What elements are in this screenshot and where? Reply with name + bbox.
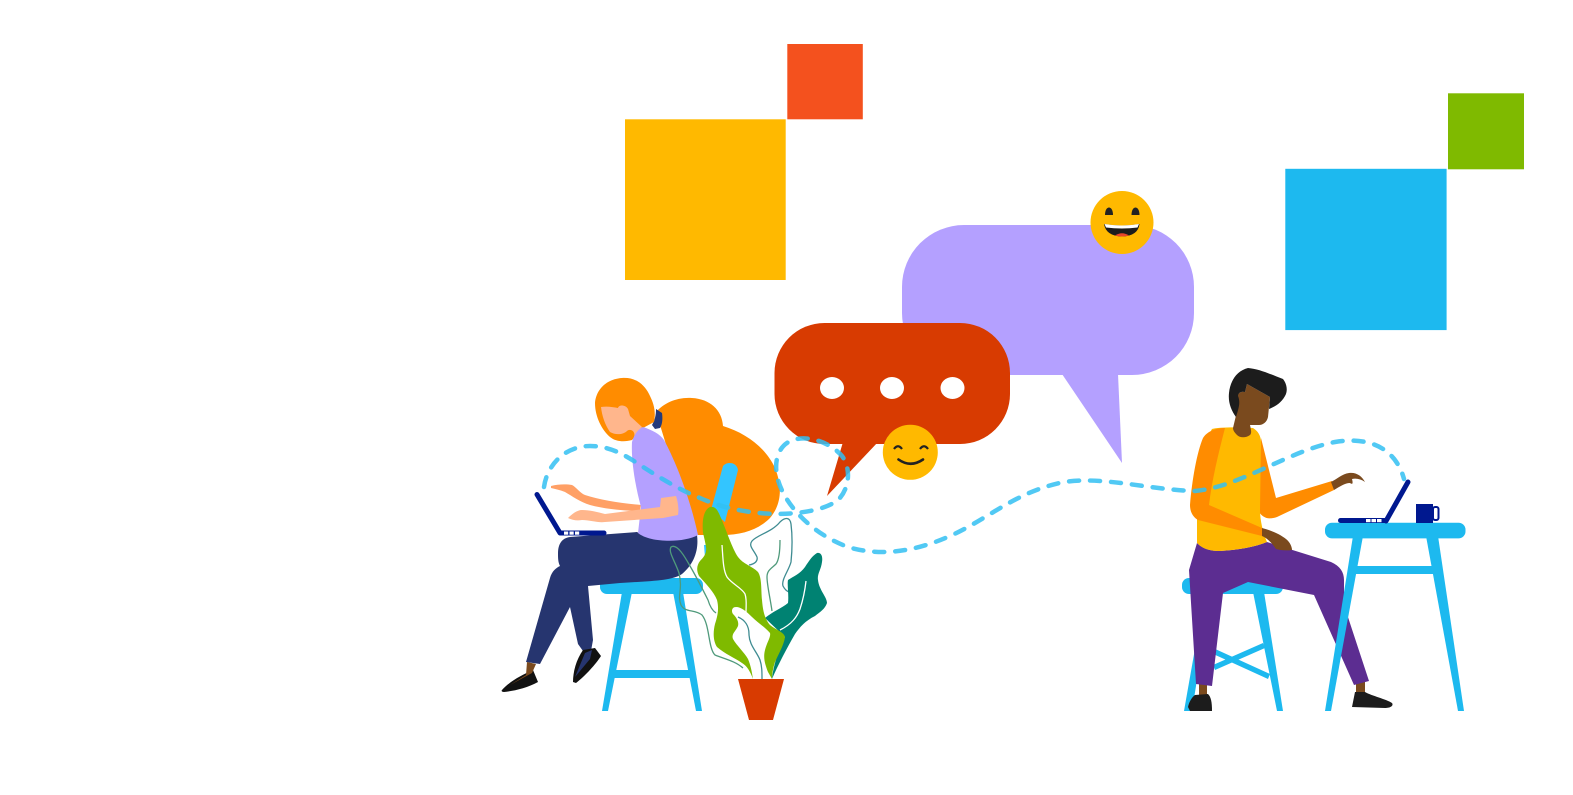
purple speech bubble <box>902 225 1194 463</box>
man pants <box>1189 542 1369 686</box>
man left shoe <box>1188 694 1212 711</box>
cyan tablet strip <box>704 463 738 558</box>
man head <box>1233 384 1270 437</box>
green leaf vein <box>722 545 746 612</box>
woman seated at laptop <box>502 378 780 692</box>
collar <box>652 409 662 429</box>
hair bun <box>656 398 780 535</box>
man seated at table <box>1188 368 1393 711</box>
man hair <box>1229 368 1287 417</box>
red speech bubble <box>774 323 1010 496</box>
man shirt <box>1197 427 1267 551</box>
woman shirt <box>632 427 698 541</box>
vine centre <box>767 540 780 611</box>
woman left shoe <box>502 670 538 692</box>
icon: laughing emoji <box>1090 191 1154 254</box>
green leaf <box>697 507 785 679</box>
plant pot <box>738 679 784 720</box>
woman laptop <box>537 494 606 536</box>
man back hand <box>1331 473 1365 490</box>
vine left <box>670 546 743 668</box>
woman right shoe inner <box>575 650 592 677</box>
man right shoe <box>1352 692 1393 708</box>
woman back arm <box>551 484 641 511</box>
woman stool <box>600 578 703 711</box>
yellow square <box>625 119 786 280</box>
blue square <box>1285 169 1447 330</box>
plant <box>670 507 827 720</box>
woman front arm <box>568 496 678 522</box>
icon: smiling emoji <box>883 425 938 480</box>
vine back <box>749 518 792 592</box>
dashed connection line <box>544 438 1404 552</box>
man ankles <box>1199 683 1207 695</box>
woman pants <box>526 532 697 664</box>
man laptop <box>1338 482 1408 523</box>
man back arm <box>1258 438 1334 518</box>
vine front <box>738 617 762 679</box>
man stool <box>1182 578 1283 711</box>
woman right shoe <box>573 648 601 683</box>
orange-red square <box>787 44 863 119</box>
man front arm <box>1190 428 1262 536</box>
green square <box>1448 93 1524 169</box>
teal leaf vein <box>780 581 806 630</box>
mug <box>1416 504 1438 523</box>
woman face <box>601 405 642 437</box>
woman left ankle <box>510 662 536 685</box>
teal leaf <box>765 553 827 679</box>
table <box>1325 523 1466 711</box>
man front hand <box>1262 528 1292 550</box>
woman hair <box>595 378 655 441</box>
